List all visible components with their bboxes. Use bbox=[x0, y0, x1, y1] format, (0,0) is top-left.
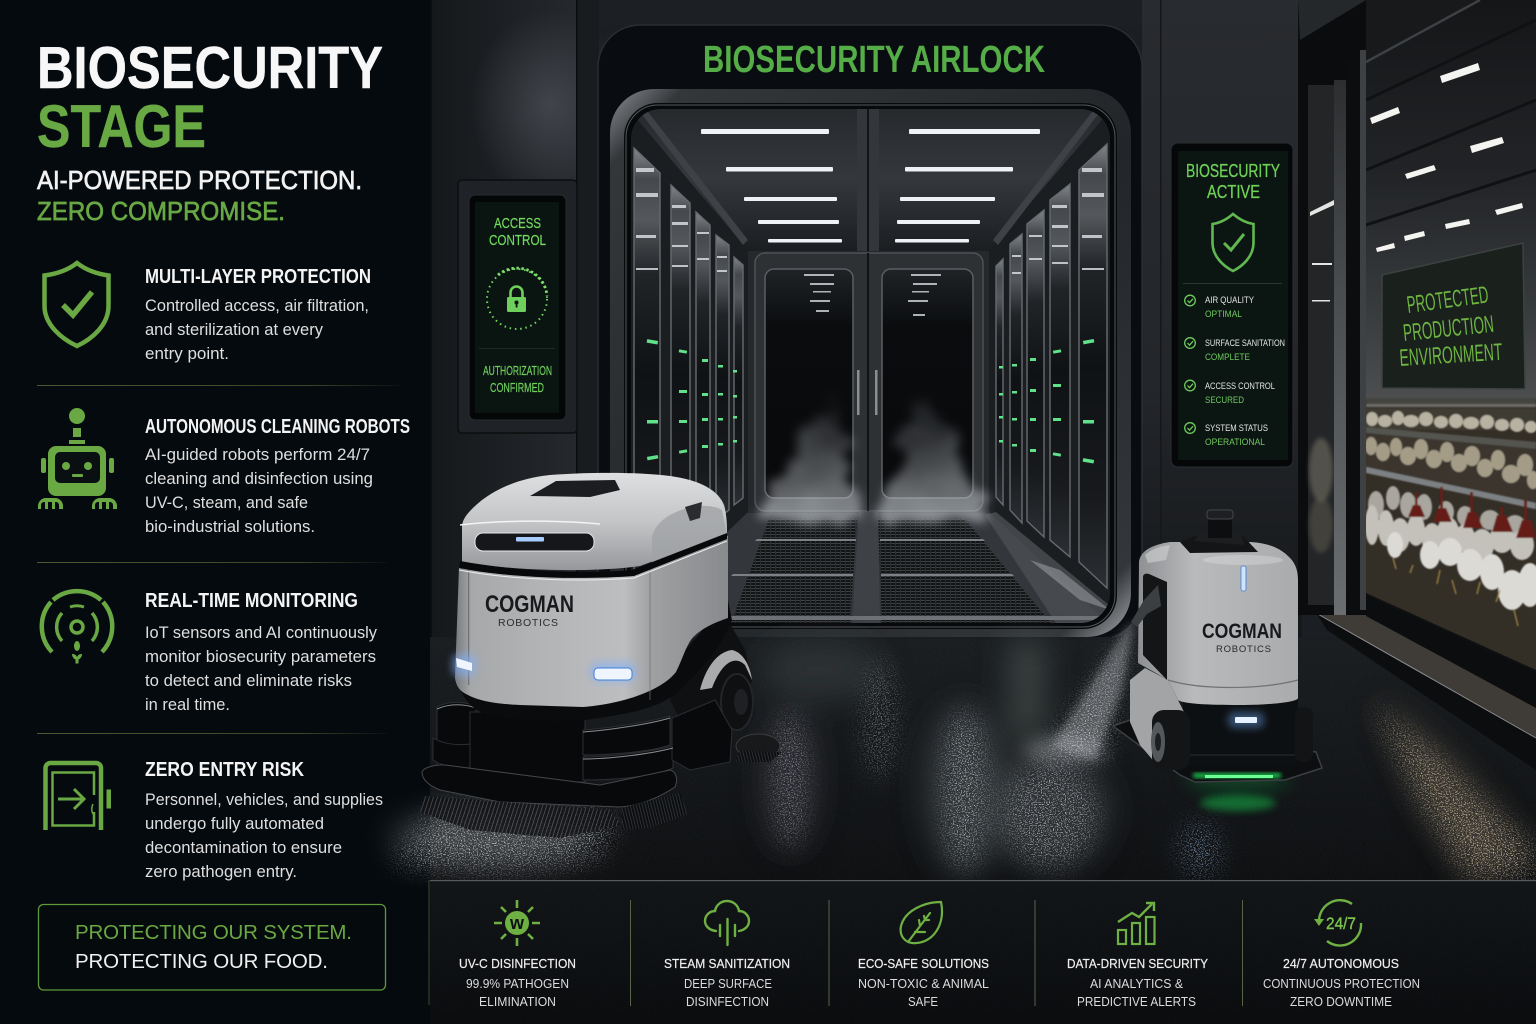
front sensor window bbox=[475, 533, 594, 551]
side brush bbox=[735, 734, 782, 762]
lights bbox=[1228, 712, 1264, 728]
feature: data-driven security bbox=[1067, 903, 1209, 1009]
nozzle bbox=[1131, 585, 1161, 627]
feature: eco-safe solutions: ECO-SAFE SOLUTIONS bbox=[858, 957, 989, 971]
item: real-time monitoring: IoT sensors and AI continuously bbox=[145, 624, 378, 642]
item: zero entry risk: Personnel, vehicles, and supplies bbox=[145, 791, 383, 809]
feature: uv-c disinfection: ELIMINATION bbox=[479, 995, 556, 1009]
large robot: ROBOTICS bbox=[498, 617, 558, 629]
headlights bbox=[452, 654, 636, 682]
item: autonomous cleaning robots: cleaning and disinfection using bbox=[145, 470, 373, 488]
icon: airlock door bbox=[46, 763, 110, 830]
top shell bbox=[462, 473, 727, 570]
chicken flock bbox=[1365, 398, 1536, 626]
icon: robot bbox=[38, 408, 117, 509]
glass side panels bbox=[634, 144, 1107, 600]
status: access control: ACCESS CONTROL bbox=[1205, 381, 1275, 392]
sensor bbox=[1180, 536, 1258, 553]
subtitle bbox=[37, 165, 362, 226]
airlock title: BIOSECURITY AIRLOCK bbox=[703, 39, 1045, 81]
callout: PROTECTING OUR FOOD. bbox=[75, 950, 328, 973]
icon: 24/7 cycle bbox=[1314, 900, 1361, 946]
icon: shield bbox=[44, 263, 108, 346]
feature: steam sanitization: DISINFECTION bbox=[686, 995, 769, 1009]
panel: access control bbox=[458, 180, 577, 433]
item: real-time monitoring: in real time. bbox=[145, 696, 230, 714]
icon: dotted ring and padlock bbox=[487, 268, 547, 329]
title: STAGE bbox=[37, 93, 206, 160]
feature: eco-safe solutions: SAFE bbox=[908, 995, 938, 1009]
steam bbox=[755, 395, 990, 520]
item: autonomous cleaning robots: UV-C, steam, and safe bbox=[145, 494, 308, 512]
status: access control bbox=[1185, 380, 1275, 406]
panel: access control: CONFIRMED bbox=[490, 381, 544, 395]
body bbox=[455, 536, 728, 707]
item: zero entry risk bbox=[46, 759, 383, 881]
feature: 24/7 autonomous: 24/7 AUTONOMOUS bbox=[1283, 957, 1399, 971]
airlock tunnel bbox=[610, 89, 1131, 637]
back doors bbox=[748, 251, 989, 513]
spray bbox=[1023, 622, 1134, 761]
panel: access control: CONTROL bbox=[489, 232, 546, 249]
barn window bbox=[1316, 0, 1536, 770]
mist bbox=[390, 805, 620, 872]
status: air quality: OPTIMAL bbox=[1205, 309, 1242, 320]
status: air quality: AIR QUALITY bbox=[1205, 295, 1255, 306]
base plate bbox=[422, 765, 677, 807]
robot branding: COGMAN bbox=[1202, 620, 1282, 643]
feature: uv-c disinfection: UV-C DISINFECTION bbox=[459, 957, 576, 971]
feature: eco-safe solutions bbox=[858, 902, 989, 1009]
item: autonomous cleaning robots bbox=[38, 408, 410, 536]
item: zero entry risk: zero pathogen entry. bbox=[145, 863, 297, 881]
status: air quality bbox=[1185, 295, 1255, 320]
floor grating bbox=[731, 512, 1108, 623]
green wall LEDs bbox=[647, 339, 1094, 464]
item: zero entry risk: undergo fully automated bbox=[145, 815, 324, 833]
lower black skirt bbox=[458, 600, 732, 721]
top hatch bbox=[530, 480, 620, 497]
feature: steam sanitization bbox=[664, 901, 790, 1009]
wet floor bbox=[430, 637, 1536, 880]
panel: biosecurity active: ACTIVE bbox=[1207, 182, 1260, 202]
status: surface sanitation: SURFACE SANITATION bbox=[1205, 338, 1285, 349]
status: system status: OPERATIONAL bbox=[1205, 437, 1265, 448]
status: surface sanitation bbox=[1185, 338, 1285, 363]
icon: 24/7 cycle: 24/7 bbox=[1326, 914, 1356, 933]
airlock housing bbox=[598, 25, 1142, 639]
item: multi-layer protection: MULTI-LAYER PROTECTION bbox=[145, 266, 371, 288]
item: autonomous cleaning robots: bio-industrial solutions. bbox=[145, 518, 315, 536]
background scene wall bbox=[430, 0, 1536, 1024]
status: system status bbox=[1185, 423, 1268, 448]
feature: 24/7 autonomous: ZERO DOWNTIME bbox=[1290, 995, 1392, 1009]
status: system status: SYSTEM STATUS bbox=[1205, 423, 1268, 434]
feature: data-driven security: PREDICTIVE ALERTS bbox=[1077, 995, 1196, 1009]
item: multi-layer protection bbox=[44, 263, 371, 363]
feature: eco-safe solutions: NON-TOXIC & ANIMAL bbox=[858, 977, 989, 991]
item: zero entry risk: ZERO ENTRY RISK bbox=[145, 759, 304, 781]
item: autonomous cleaning robots: AUTONOMOUS CLEANING ROBOTS bbox=[145, 416, 410, 438]
side fender bbox=[1130, 668, 1184, 765]
callout: PROTECTING OUR SYSTEM. bbox=[75, 921, 352, 944]
robot branding: COGMAN bbox=[485, 591, 574, 618]
item: real-time monitoring bbox=[42, 590, 378, 714]
feature: 24/7 autonomous: CONTINUOUS PROTECTION bbox=[1263, 977, 1420, 991]
item: real-time monitoring: REAL-TIME MONITORING bbox=[145, 590, 358, 612]
base blocks bbox=[433, 700, 732, 782]
panel: biosecurity active: BIOSECURITY bbox=[1186, 161, 1280, 181]
feature: 24/7 autonomous bbox=[1263, 900, 1420, 1009]
window sill bbox=[1316, 600, 1536, 738]
item: real-time monitoring: monitor biosecurity parameters bbox=[145, 648, 376, 666]
left panel bbox=[0, 0, 430, 1024]
item: autonomous cleaning robots: AI-guided robots perform 24/7 bbox=[145, 446, 370, 464]
subtitle: ZERO COMPROMISE. bbox=[37, 196, 285, 226]
icon: leaf bbox=[901, 902, 942, 943]
item: real-time monitoring: to detect and eliminate risks bbox=[145, 672, 352, 690]
callout bbox=[38, 904, 386, 990]
item: multi-layer protection: entry point. bbox=[145, 345, 229, 363]
seam band bbox=[459, 533, 727, 578]
item: zero entry risk: decontamination to ensure bbox=[145, 839, 342, 857]
wheel and fender bbox=[670, 620, 752, 740]
bottom feature strip bbox=[428, 880, 1536, 1024]
icon: shield bbox=[1212, 214, 1254, 271]
icon: growth chart bbox=[1118, 903, 1154, 944]
body bbox=[1138, 542, 1298, 705]
item: multi-layer protection: Controlled access, air filtration, bbox=[145, 297, 369, 315]
feature: steam sanitization: STEAM SANITIZATION bbox=[664, 957, 790, 971]
subtitle: AI-POWERED PROTECTION. bbox=[37, 165, 362, 195]
title bbox=[37, 35, 383, 160]
feature: data-driven security: DATA-DRIVEN SECURITY bbox=[1067, 957, 1209, 971]
status: surface sanitation: COMPLETE bbox=[1205, 352, 1250, 363]
feature: uv-c disinfection bbox=[459, 900, 576, 1009]
feature: data-driven security: AI ANALYTICS & bbox=[1090, 977, 1184, 991]
panel: biosecurity active bbox=[1171, 143, 1293, 467]
feature: steam sanitization: DEEP SURFACE bbox=[684, 977, 772, 991]
small robot with spray: ROBOTICS bbox=[1216, 644, 1271, 655]
large robot bbox=[390, 473, 782, 872]
icon: sensor waves bbox=[42, 591, 112, 652]
ceiling lights bbox=[701, 129, 1040, 242]
feature: uv-c disinfection: 99.9% PATHOGEN bbox=[466, 977, 569, 991]
item: multi-layer protection: and sterilization at every bbox=[145, 321, 324, 339]
brushes bbox=[420, 792, 688, 838]
icon: steam cloud bbox=[705, 901, 749, 945]
sign: protected production environment bbox=[1382, 243, 1525, 389]
status: access control: SECURED bbox=[1205, 395, 1244, 406]
title: BIOSECURITY bbox=[37, 35, 383, 101]
small robot with spray bbox=[1023, 510, 1322, 782]
window frame and glass strip bbox=[1298, 0, 1480, 615]
wheels bbox=[1152, 710, 1190, 770]
panel: access control: ACCESS bbox=[494, 215, 541, 232]
panel: access control: AUTHORIZATION bbox=[483, 364, 552, 378]
icon: uv lamp: w bbox=[509, 913, 525, 933]
